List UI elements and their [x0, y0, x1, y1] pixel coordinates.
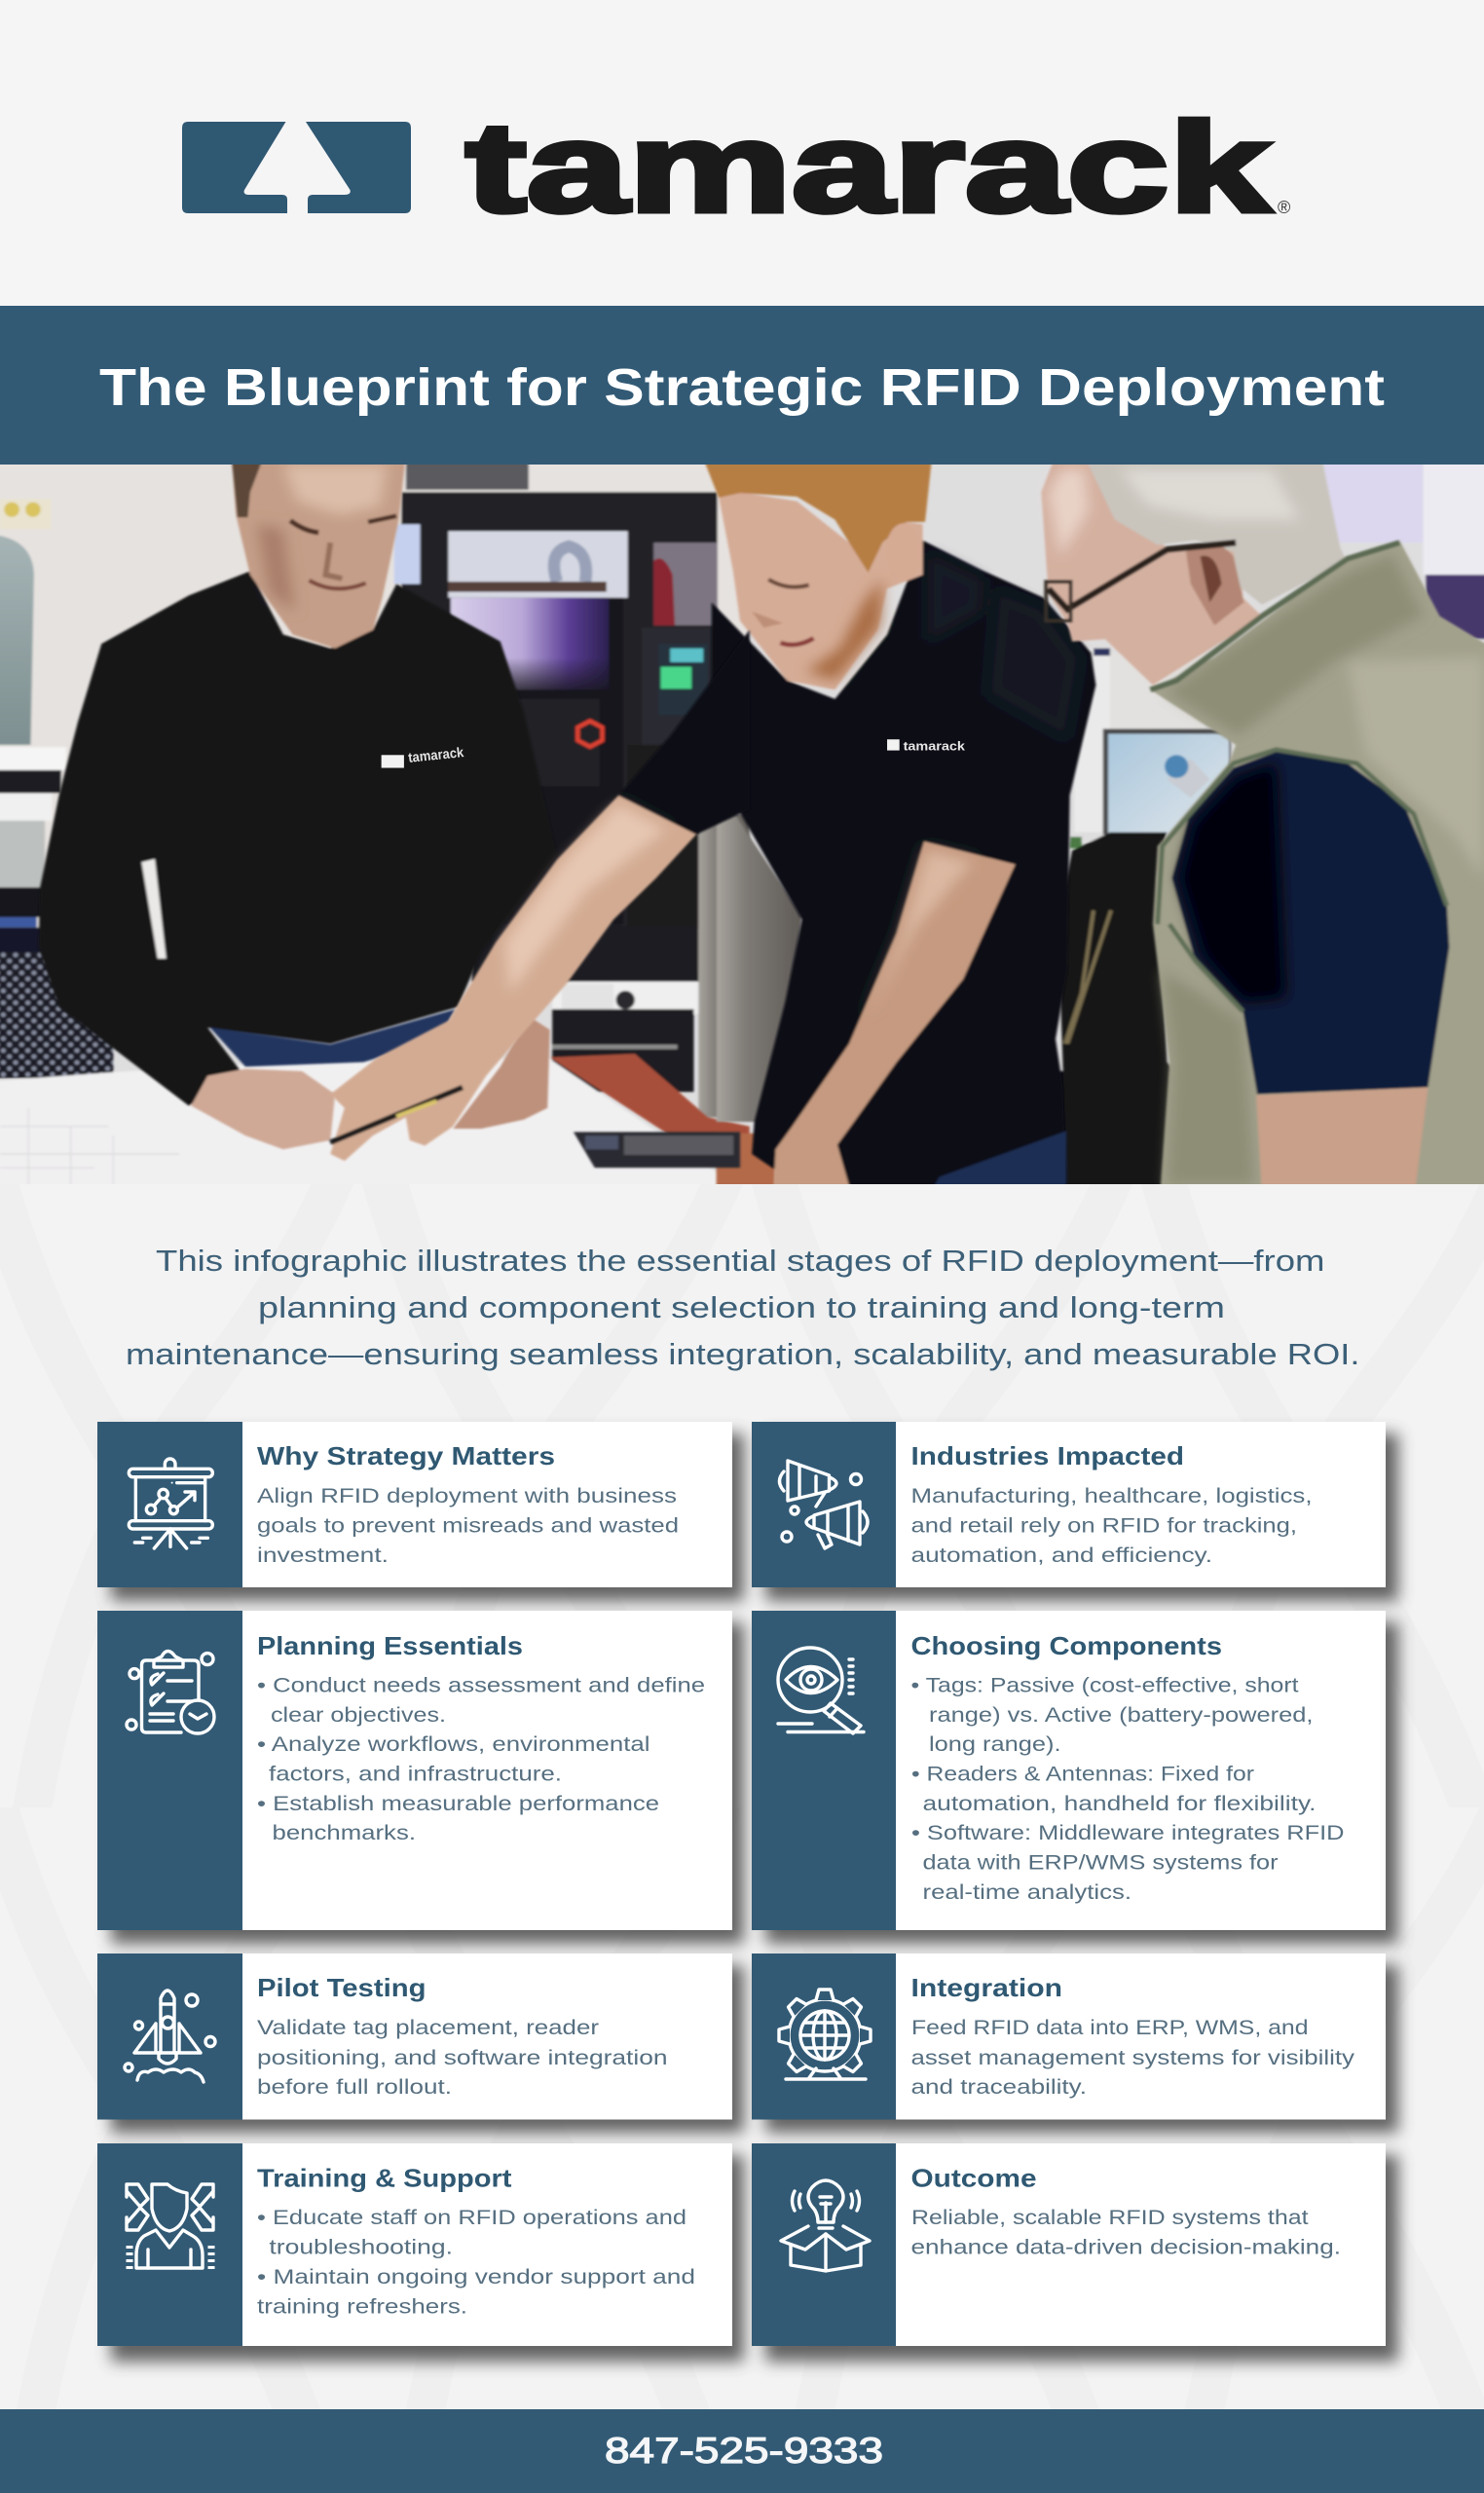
heading: Industries Impacted [911, 1441, 1184, 1470]
body text: long range). [929, 1732, 1061, 1756]
body text: enhance data-driven decision-making. [911, 2236, 1341, 2259]
panel: training and support [97, 2143, 732, 2346]
logo wordmark: tamarack [465, 95, 1271, 239]
shirt logo left: tamarack [407, 745, 464, 766]
heading: Outcome [911, 2164, 1036, 2193]
icon: presentation board with chart [129, 1459, 212, 1548]
logo: tamarack [182, 95, 1290, 239]
body text: • Establish measurable performance [257, 1792, 659, 1815]
body text: Manufacturing, healthcare, logistics, [911, 1484, 1313, 1507]
photo left half: room, printer, man in long sleeve [0, 456, 750, 1195]
body text: data with ERP/WMS systems for [923, 1850, 1278, 1874]
body text: • Software: Middleware integrates RFID [911, 1821, 1344, 1844]
body text: and retail rely on RFID for tracking, [911, 1513, 1297, 1537]
footer band [0, 2409, 1484, 2493]
body text: troubleshooting. [269, 2236, 453, 2259]
heading: Pilot Testing [257, 1973, 427, 2002]
body text: factors, and infrastructure. [269, 1763, 562, 1786]
title banner [0, 306, 1484, 465]
body text [911, 2016, 1354, 2099]
body text [257, 1673, 705, 1844]
panel: pilot testing [97, 1953, 732, 2119]
body text: positioning, and software integration [257, 2046, 668, 2069]
panel: outcome [752, 2143, 1386, 2346]
icon: rocket [125, 1991, 215, 2082]
title: The Blueprint for Strategic RFID Deployment [99, 358, 1385, 417]
body text: • Maintain ongoing vendor support and [257, 2265, 695, 2288]
body text [911, 1484, 1313, 1567]
heading: Choosing Components [911, 1631, 1222, 1660]
icon: clipboard with clock [127, 1652, 214, 1733]
body text [257, 2016, 668, 2099]
panel: industries impacted [752, 1422, 1386, 1587]
body text: benchmarks. [273, 1821, 416, 1844]
shirt logo centre [887, 739, 965, 751]
body text: Reliable, scalable RFID systems that [911, 2206, 1309, 2229]
shirt logo left [382, 745, 464, 768]
body text: • Educate staff on RFID operations and [257, 2206, 686, 2229]
photo: three men reviewing plans at a table [0, 456, 1484, 1195]
registered mark: ® [1278, 198, 1290, 217]
body text: Feed RFID data into ERP, WMS, and [911, 2016, 1309, 2039]
heading: Training & Support [257, 2164, 512, 2193]
body text: • Analyze workflows, environmental [257, 1732, 650, 1756]
phone number: 847-525-9333 [605, 2431, 883, 2471]
intro text: maintenance—ensuring seamless integration, scalability, and measurable ROI. [126, 1337, 1359, 1371]
icon: person with arrows [127, 2184, 213, 2269]
body text: automation, and efficiency. [911, 1544, 1212, 1567]
intro text: This infographic illustrates the essential stages of RFID deployment—from [156, 1244, 1324, 1278]
body text: asset management systems for visibility [911, 2046, 1354, 2069]
body text: automation, handheld for flexibility. [923, 1792, 1317, 1815]
body text: Align RFID deployment with business [257, 1484, 677, 1507]
body text: real-time analytics. [923, 1880, 1132, 1904]
heading: Integration [911, 1973, 1062, 2002]
panel: integration [752, 1953, 1386, 2119]
panel: choosing components [752, 1611, 1386, 1930]
table [0, 1058, 717, 1184]
panel: why strategy matters [97, 1422, 732, 1587]
photo right half: background and man in polo [702, 456, 1484, 1195]
body text: goals to prevent misreads and wasted [257, 1513, 679, 1537]
icon: tamarack tree mark [182, 122, 411, 213]
body text: Validate tag placement, reader [257, 2016, 599, 2039]
3D printer [404, 465, 530, 491]
icon: magnifier with eye [778, 1648, 864, 1733]
heading: Planning Essentials [257, 1631, 523, 1660]
body text: range) vs. Active (battery-powered, [929, 1703, 1313, 1727]
body text [911, 2206, 1341, 2259]
icon: gear and globe [779, 1990, 871, 2079]
body text: • Readers & Antennas: Fixed for [911, 1763, 1254, 1786]
panel: planning essentials [97, 1611, 732, 1930]
body text: clear objectives. [271, 1703, 446, 1727]
body text: and traceability. [911, 2075, 1087, 2099]
icon: light bulb in box [781, 2180, 870, 2271]
body text: • Tags: Passive (cost-effective, short [911, 1673, 1299, 1696]
icon: megaphones [779, 1461, 868, 1548]
body text [257, 1484, 679, 1567]
man right [1041, 456, 1484, 1195]
body text: before full rollout. [257, 2075, 452, 2099]
body text: • Conduct needs assessment and define [257, 1673, 705, 1696]
intro text: planning and component selection to training and long-term [258, 1290, 1225, 1324]
body text: training refreshers. [257, 2294, 467, 2318]
body text [911, 1673, 1344, 1904]
heading: Why Strategy Matters [257, 1441, 555, 1470]
intro text [126, 1244, 1359, 1371]
photo foreground left: arm, pen and calculator [330, 630, 750, 1168]
body text [257, 2206, 695, 2318]
body text: investment. [257, 1544, 389, 1567]
shirt logo centre: tamarack [904, 739, 966, 754]
man left [39, 456, 557, 1149]
